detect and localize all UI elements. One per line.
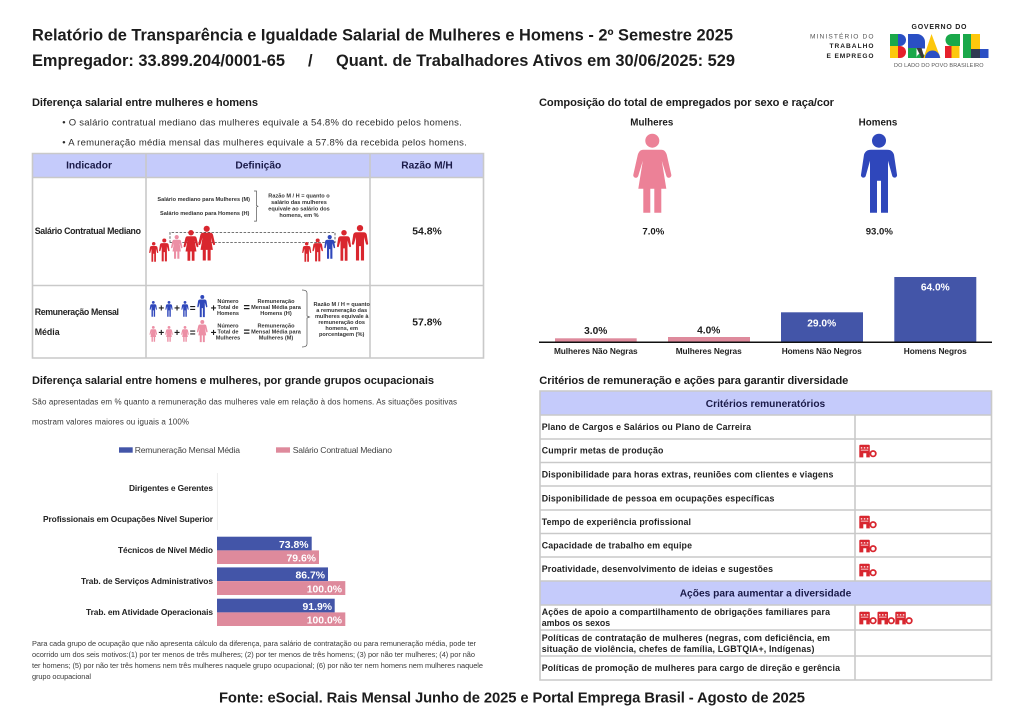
- diagram: remuneração mensal média: Homens (H): [260, 311, 292, 317]
- diagram: remuneração mensal média: Razão M / H = quanto: [313, 302, 370, 308]
- diagram: remuneração mensal média: homens, em: [325, 326, 358, 332]
- diagram: remuneração mensal média: +: [174, 328, 180, 339]
- heading: grupos ocupacionais: Diferença salarial entre homens e mulheres, por grande grupos ocupacionais: [32, 375, 434, 387]
- panel: grupos ocupacionais: [32, 375, 483, 681]
- diagram: remuneração mensal média: +: [174, 304, 180, 314]
- diagram: salário contratual mediano: salário das mulheres: [271, 200, 327, 206]
- bar chart: grupos ocupacionais: Trab. em Atividade Operacionais: [86, 607, 213, 617]
- logo: governo do brasil: [890, 24, 988, 69]
- text block: nota: ter homens; (5) por não ter três homens nem três mulheres naquele grupo ocupacional; (6) por não ter nem homens nem mulheres naquele: [32, 661, 483, 670]
- text block: bullets: [62, 118, 467, 148]
- bar chart: grupos ocupacionais: 86.7%: [296, 571, 325, 582]
- panel: diferença salarial: [32, 97, 484, 358]
- logo: governo do brasil: DO LADO DO POVO BRASILEIRO: [894, 63, 984, 69]
- logo: ministério do trabalho e emprego: MINISTÉRIO DO: [810, 31, 874, 40]
- diagram: remuneração mensal média: remuneração dos: [318, 320, 365, 326]
- icon: homem: Homens: [859, 118, 898, 129]
- heading: critérios: Critérios de remuneração e ações para garantir diversidade: [539, 375, 848, 387]
- bar chart: sexo e raça: Mulheres Negras: [676, 346, 742, 356]
- icon: homem: [859, 118, 898, 238]
- bar chart: sexo e raça: Mulheres Não Negras: [554, 346, 638, 356]
- heading: diferença salarial: Diferença salarial entre mulheres e homens: [32, 97, 258, 109]
- table: critérios remuneratórios: Disponibilidade para horas extras, reuniões com clientes e viagens: [542, 470, 833, 480]
- bar chart: grupos ocupacionais: Trab. de Serviços Administrativos: [81, 576, 213, 586]
- diagram: remuneração mensal média: =: [243, 302, 250, 314]
- table: critérios remuneratórios: [540, 391, 992, 680]
- diagram: remuneração mensal média: Homens: [217, 311, 239, 317]
- text block: introdução: mostram valores maiores ou iguais a 100%: [32, 417, 189, 426]
- title: Quant. de Trabalhadores Ativos em 30/06/2025: 529: [336, 52, 735, 70]
- icon: mulher: 7.0%: [642, 227, 665, 238]
- diagram: salário contratual mediano: equivale ao salário dos: [268, 207, 330, 213]
- table: critérios remuneratórios: Disponibilidade de pessoa em ocupações específicas: [542, 494, 774, 504]
- text block: nota: Para cada grupo de ocupação que não apresenta cálculo da diferença, para salário de contratação ou para remuneração média, pode ter: [32, 639, 477, 648]
- table: critérios remuneratórios: ambos os sexos: [542, 618, 610, 628]
- bar chart: grupos ocupacionais: 91.9%: [303, 602, 332, 613]
- table: indicadores: [32, 154, 484, 358]
- diagram: remuneração mensal média: =: [190, 328, 196, 339]
- table: critérios remuneratórios: situação de violência, chefes de família, LGBTQIA+, Indígenas): [542, 644, 814, 654]
- icon: mulher: [630, 118, 674, 238]
- diagram: remuneração mensal média: +: [211, 328, 217, 339]
- bar chart: sexo e raça: Homens Não Negros: [782, 346, 862, 356]
- diagram: remuneração mensal média: Número: [217, 299, 239, 305]
- icon: mulher: Mulheres: [630, 118, 674, 129]
- diagram: remuneração mensal média: Remuneração: [258, 324, 295, 330]
- diagram: remuneração mensal média: mulheres equivale à: [315, 314, 369, 320]
- diagram: remuneração mensal média: [149, 290, 370, 347]
- table: indicadores: Indicador: [66, 160, 112, 172]
- diagram: salário contratual mediano: Razão M / H = quanto o: [268, 194, 330, 200]
- diagram: salário contratual mediano: Salário mediano para Homens (H): [160, 211, 249, 217]
- table: critérios remuneratórios: Políticas de promoção de mulheres para cargo de direção e gerência: [542, 663, 840, 673]
- bar chart: grupos ocupacionais: 100.0%: [307, 584, 342, 595]
- text block: nota: ocorrido um dos seis motivos:(1) por ter menos de três mulheres; (2) por ter menos de três homens; (3) por não ter mulheres; (4) por não: [32, 650, 475, 659]
- legend: [119, 445, 392, 455]
- diagram: remuneração mensal média: =: [190, 304, 196, 314]
- title: Empregador: 33.899.204/0001-65: [32, 52, 285, 70]
- table: indicadores: 54.8%: [412, 227, 442, 238]
- diagram: remuneração mensal média: +: [211, 304, 217, 314]
- panel: composição: [539, 97, 992, 356]
- logo: ministério do trabalho e emprego: TRABALHO: [830, 43, 874, 50]
- diagram: salário contratual mediano: Salário mediano para Mulheres (M): [157, 197, 250, 203]
- table: indicadores: Média: [35, 327, 60, 337]
- bar chart: sexo e raça: 64.0%: [921, 283, 950, 294]
- text block: nota: [32, 639, 483, 681]
- logo: ministério do trabalho e emprego: [810, 31, 874, 60]
- heading: composição: Composição do total de empregados por sexo e raça/cor: [539, 97, 835, 109]
- table: critérios remuneratórios: Ações de apoio a compartilhamento de obrigações familiares para: [542, 607, 830, 617]
- table: critérios remuneratórios: Critérios remuneratórios: [706, 399, 826, 410]
- bar chart: sexo e raça: 29.0%: [807, 318, 836, 329]
- icon: homem: 93.0%: [866, 227, 893, 238]
- table: critérios remuneratórios: Plano de Cargos e Salários ou Plano de Carreira: [542, 422, 751, 432]
- diagram: remuneração mensal média: +: [158, 304, 164, 314]
- diagram: remuneração mensal média: Número: [217, 324, 239, 330]
- logo: ministério do trabalho e emprego: E EMPREGO: [826, 53, 874, 60]
- diagram: remuneração mensal média: =: [243, 326, 250, 338]
- table: critérios remuneratórios: Cumprir metas de produção: [542, 446, 664, 456]
- diagram: remuneração mensal média: Mensal Média para: [251, 305, 302, 311]
- bar chart: sexo e raça: Homens Negros: [904, 346, 967, 356]
- diagram: remuneração mensal média: Mulheres: [216, 336, 240, 342]
- table: critérios remuneratórios: Políticas de contratação de mulheres (negras, com deficiência, em: [542, 633, 830, 643]
- bar chart: grupos ocupacionais: Profissionais em Ocupações Nível Superior: [43, 514, 214, 524]
- legend: Salário Contratual Mediano: [293, 445, 392, 455]
- diagram: remuneração mensal média: Remuneração: [258, 299, 295, 305]
- table: indicadores: Remuneração Mensal: [35, 307, 119, 317]
- table: indicadores: Salário Contratual Mediano: [35, 226, 142, 236]
- table: indicadores: Definição: [235, 160, 281, 172]
- diagram: remuneração mensal média: a remuneração das: [316, 308, 367, 314]
- title: /: [308, 52, 313, 70]
- title: Relatório de Transparência e Igualdade Salarial de Mulheres e Homens - 2º Semestre 2025: [32, 27, 733, 45]
- table: critérios remuneratórios: Tempo de experiência profissional: [542, 517, 691, 527]
- logo: governo do brasil: GOVERNO DO: [912, 24, 967, 31]
- bar chart: grupos ocupacionais: [43, 473, 345, 627]
- bar chart: grupos ocupacionais: 73.8%: [279, 540, 308, 551]
- legend: Remuneração Mensal Média: [135, 445, 240, 455]
- diagram: remuneração mensal média: Mensal Média para: [251, 330, 302, 336]
- diagram: remuneração mensal média: Total de: [217, 305, 239, 311]
- diagram: salário contratual mediano: [149, 191, 368, 262]
- table: indicadores: 57.8%: [412, 318, 442, 328]
- bar chart: sexo e raça: 3.0%: [584, 326, 607, 337]
- text block: introdução: São apresentadas em % quanto a remuneração das mulheres vale em relação à dos homens. As situações positivas: [32, 398, 457, 406]
- diagram: remuneração mensal média: +: [158, 328, 164, 339]
- diagram: remuneração mensal média: porcentagem (%): [319, 332, 365, 338]
- bar chart: grupos ocupacionais: Técnicos de Nível Médio: [118, 545, 213, 555]
- text block: bullets: • O salário contratual mediano das mulheres equivale a 54.8% do recebido pelos homens.: [62, 118, 462, 128]
- text block: introdução: [32, 398, 457, 426]
- bar chart: grupos ocupacionais: 100.0%: [307, 616, 342, 627]
- bar chart: sexo e raça: 4.0%: [697, 326, 720, 336]
- text block: bullets: • A remuneração média mensal das mulheres equivale a 57.8% da recebida pelos homens.: [62, 138, 467, 148]
- diagram: salário contratual mediano: homens, em %: [279, 213, 319, 219]
- bar chart: grupos ocupacionais: Dirigentes e Gerentes: [129, 483, 213, 493]
- table: critérios remuneratórios: Proatividade, desenvolvimento de ideias e sugestões: [542, 564, 773, 574]
- panel: critérios: [539, 375, 992, 680]
- text block: nota: grupo ocupacional: [32, 672, 91, 681]
- bar chart: sexo e raça: [539, 277, 992, 356]
- title: [32, 27, 735, 70]
- footer: fonte: Fonte: eSocial. Rais Mensal Junho de 2025 e Portal Emprega Brasil - Agosto de 2025: [219, 690, 805, 706]
- table: critérios remuneratórios: Ações para aumentar a diversidade: [680, 589, 852, 600]
- bar chart: grupos ocupacionais: 79.6%: [287, 554, 316, 565]
- diagram: remuneração mensal média: Total de: [217, 330, 239, 336]
- table: indicadores: Razão M/H: [401, 160, 453, 172]
- table: critérios remuneratórios: Capacidade de trabalho em equipe: [542, 541, 692, 551]
- diagram: remuneração mensal média: Mulheres (M): [259, 336, 293, 342]
